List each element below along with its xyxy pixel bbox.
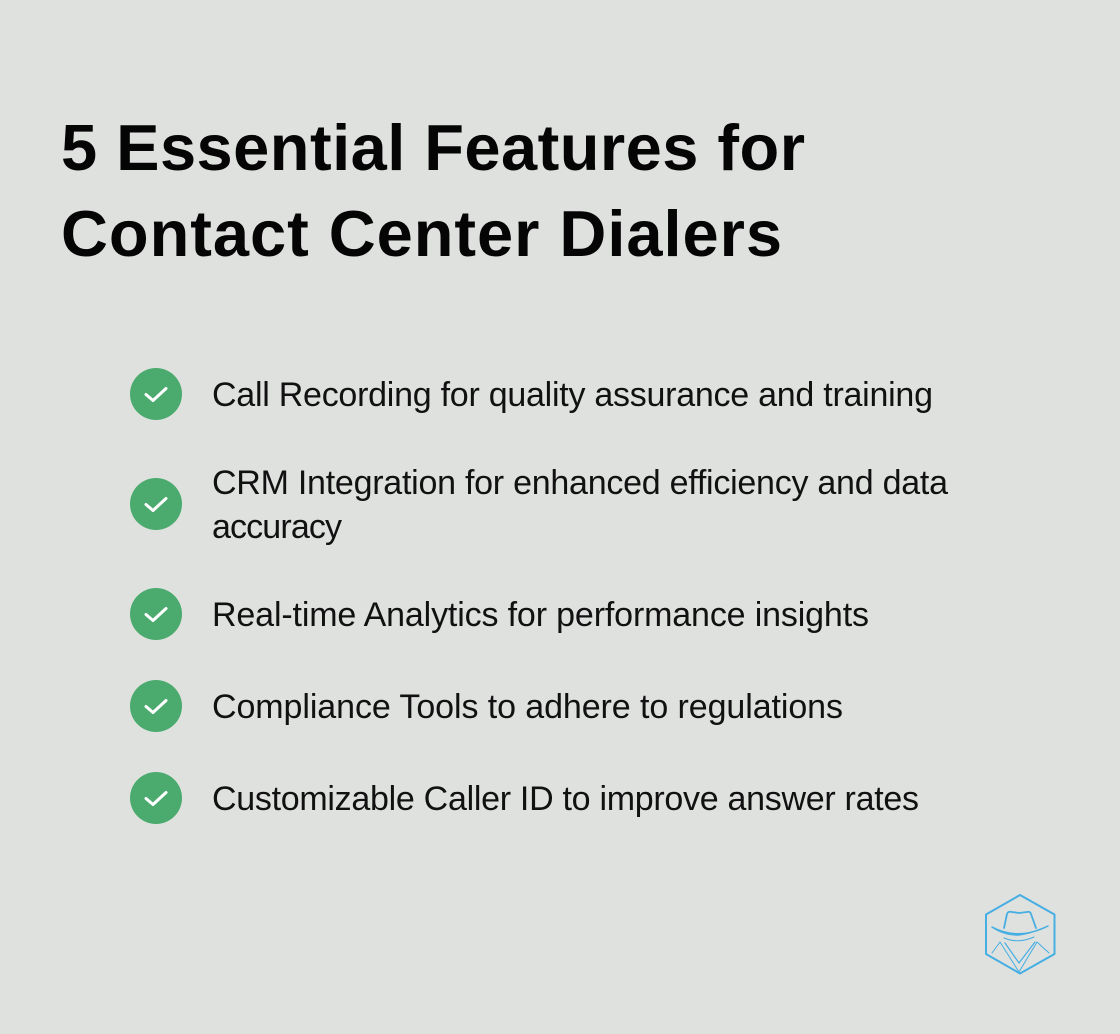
list item: customizable caller ID [130, 772, 919, 824]
title [61, 111, 805, 270]
feature list [130, 368, 948, 824]
list item: call recording [130, 368, 933, 420]
list item: real-time analytics: Real-time Analytics for performance insights [212, 596, 869, 634]
list item: call recording: Call Recording for quality assurance and training [212, 376, 933, 414]
list item: CRM integration: CRM Integration for enhanced efficiency and data [212, 464, 948, 502]
list item: real-time analytics [130, 588, 869, 640]
list item: customizable caller ID: Customizable Caller ID to improve answer rates [212, 780, 919, 818]
list item: compliance tools [130, 680, 843, 732]
list item: CRM integration [130, 464, 948, 546]
list item: compliance tools: Compliance Tools to adhere to regulations [212, 688, 843, 726]
title: 5 Essential Features for [61, 111, 805, 184]
title: Contact Center Dialers [61, 197, 782, 270]
list item: CRM integration: accuracy [212, 508, 342, 546]
icon: logo hexagon with hat and collar [986, 895, 1054, 974]
